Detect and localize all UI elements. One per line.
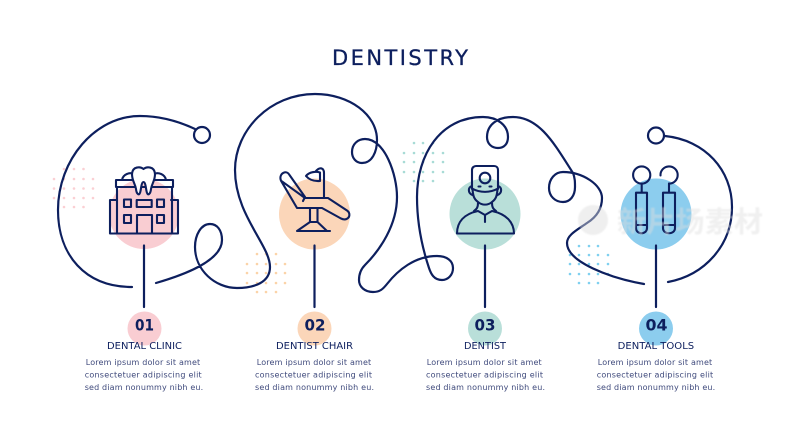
dot pattern: blue bbox=[570, 246, 608, 283]
body text: sed diam nonummy nibh eu. bbox=[426, 383, 545, 392]
watermark: 新片场素材 bbox=[617, 199, 763, 241]
connector line bbox=[655, 246, 657, 307]
heading: DENTIST bbox=[464, 341, 506, 352]
number badge 01 bbox=[128, 312, 162, 346]
body text: consectetuer adipiscing elit bbox=[85, 370, 202, 380]
dot pattern: pink bbox=[54, 169, 93, 207]
timeline curve: right arc with end node bbox=[648, 128, 732, 282]
connector line bbox=[143, 246, 145, 307]
body text: Lorem ipsum dolor sit amet bbox=[86, 358, 200, 367]
dot pattern: orange bbox=[247, 254, 285, 292]
heading: DENTIST CHAIR bbox=[276, 341, 353, 352]
number badge 04: 04 bbox=[646, 316, 668, 334]
number badge 02 bbox=[298, 312, 332, 346]
body text: consectetuer adipiscing elit bbox=[255, 370, 372, 380]
body text: sed diam nonummy nibh eu. bbox=[255, 383, 374, 392]
body text: sed diam nonummy nibh eu. bbox=[85, 383, 203, 392]
connector line bbox=[313, 246, 316, 307]
body text: sed diam nonummy nibh eu. bbox=[597, 383, 715, 392]
number badge 04 bbox=[639, 312, 673, 346]
timeline curve: left arc with start node bbox=[58, 116, 210, 287]
icon: dentist chair bbox=[279, 168, 350, 250]
icon: dental mirrors bbox=[620, 166, 692, 250]
title: DENTISTRY bbox=[332, 46, 468, 70]
number badge 03 bbox=[468, 312, 502, 346]
number badge 01: 01 bbox=[135, 316, 154, 334]
panel: dental clinic bbox=[85, 167, 203, 392]
panel: dentist chair bbox=[255, 168, 374, 392]
panel: dental tools bbox=[597, 166, 715, 392]
number badge 02: 02 bbox=[304, 316, 326, 334]
heading: DENTAL CLINIC bbox=[107, 341, 182, 352]
body text: Lorem ipsum dolor sit amet bbox=[257, 358, 371, 367]
body text: Lorem ipsum dolor sit amet bbox=[427, 358, 542, 367]
timeline curve: central looping line bbox=[156, 94, 644, 292]
connector line bbox=[484, 246, 486, 307]
heading: DENTAL TOOLS bbox=[618, 341, 694, 352]
dot pattern: teal bbox=[404, 143, 443, 181]
number badge 03: 03 bbox=[474, 316, 496, 334]
icon: dental clinic building bbox=[109, 167, 179, 249]
panel: dentist bbox=[426, 166, 545, 392]
body text: consectetuer adipiscing elit bbox=[426, 370, 543, 380]
body text: Lorem ipsum dolor sit amet bbox=[598, 358, 712, 367]
body text: consectetuer adipiscing elit bbox=[597, 370, 713, 380]
icon: dentist portrait bbox=[450, 166, 520, 250]
